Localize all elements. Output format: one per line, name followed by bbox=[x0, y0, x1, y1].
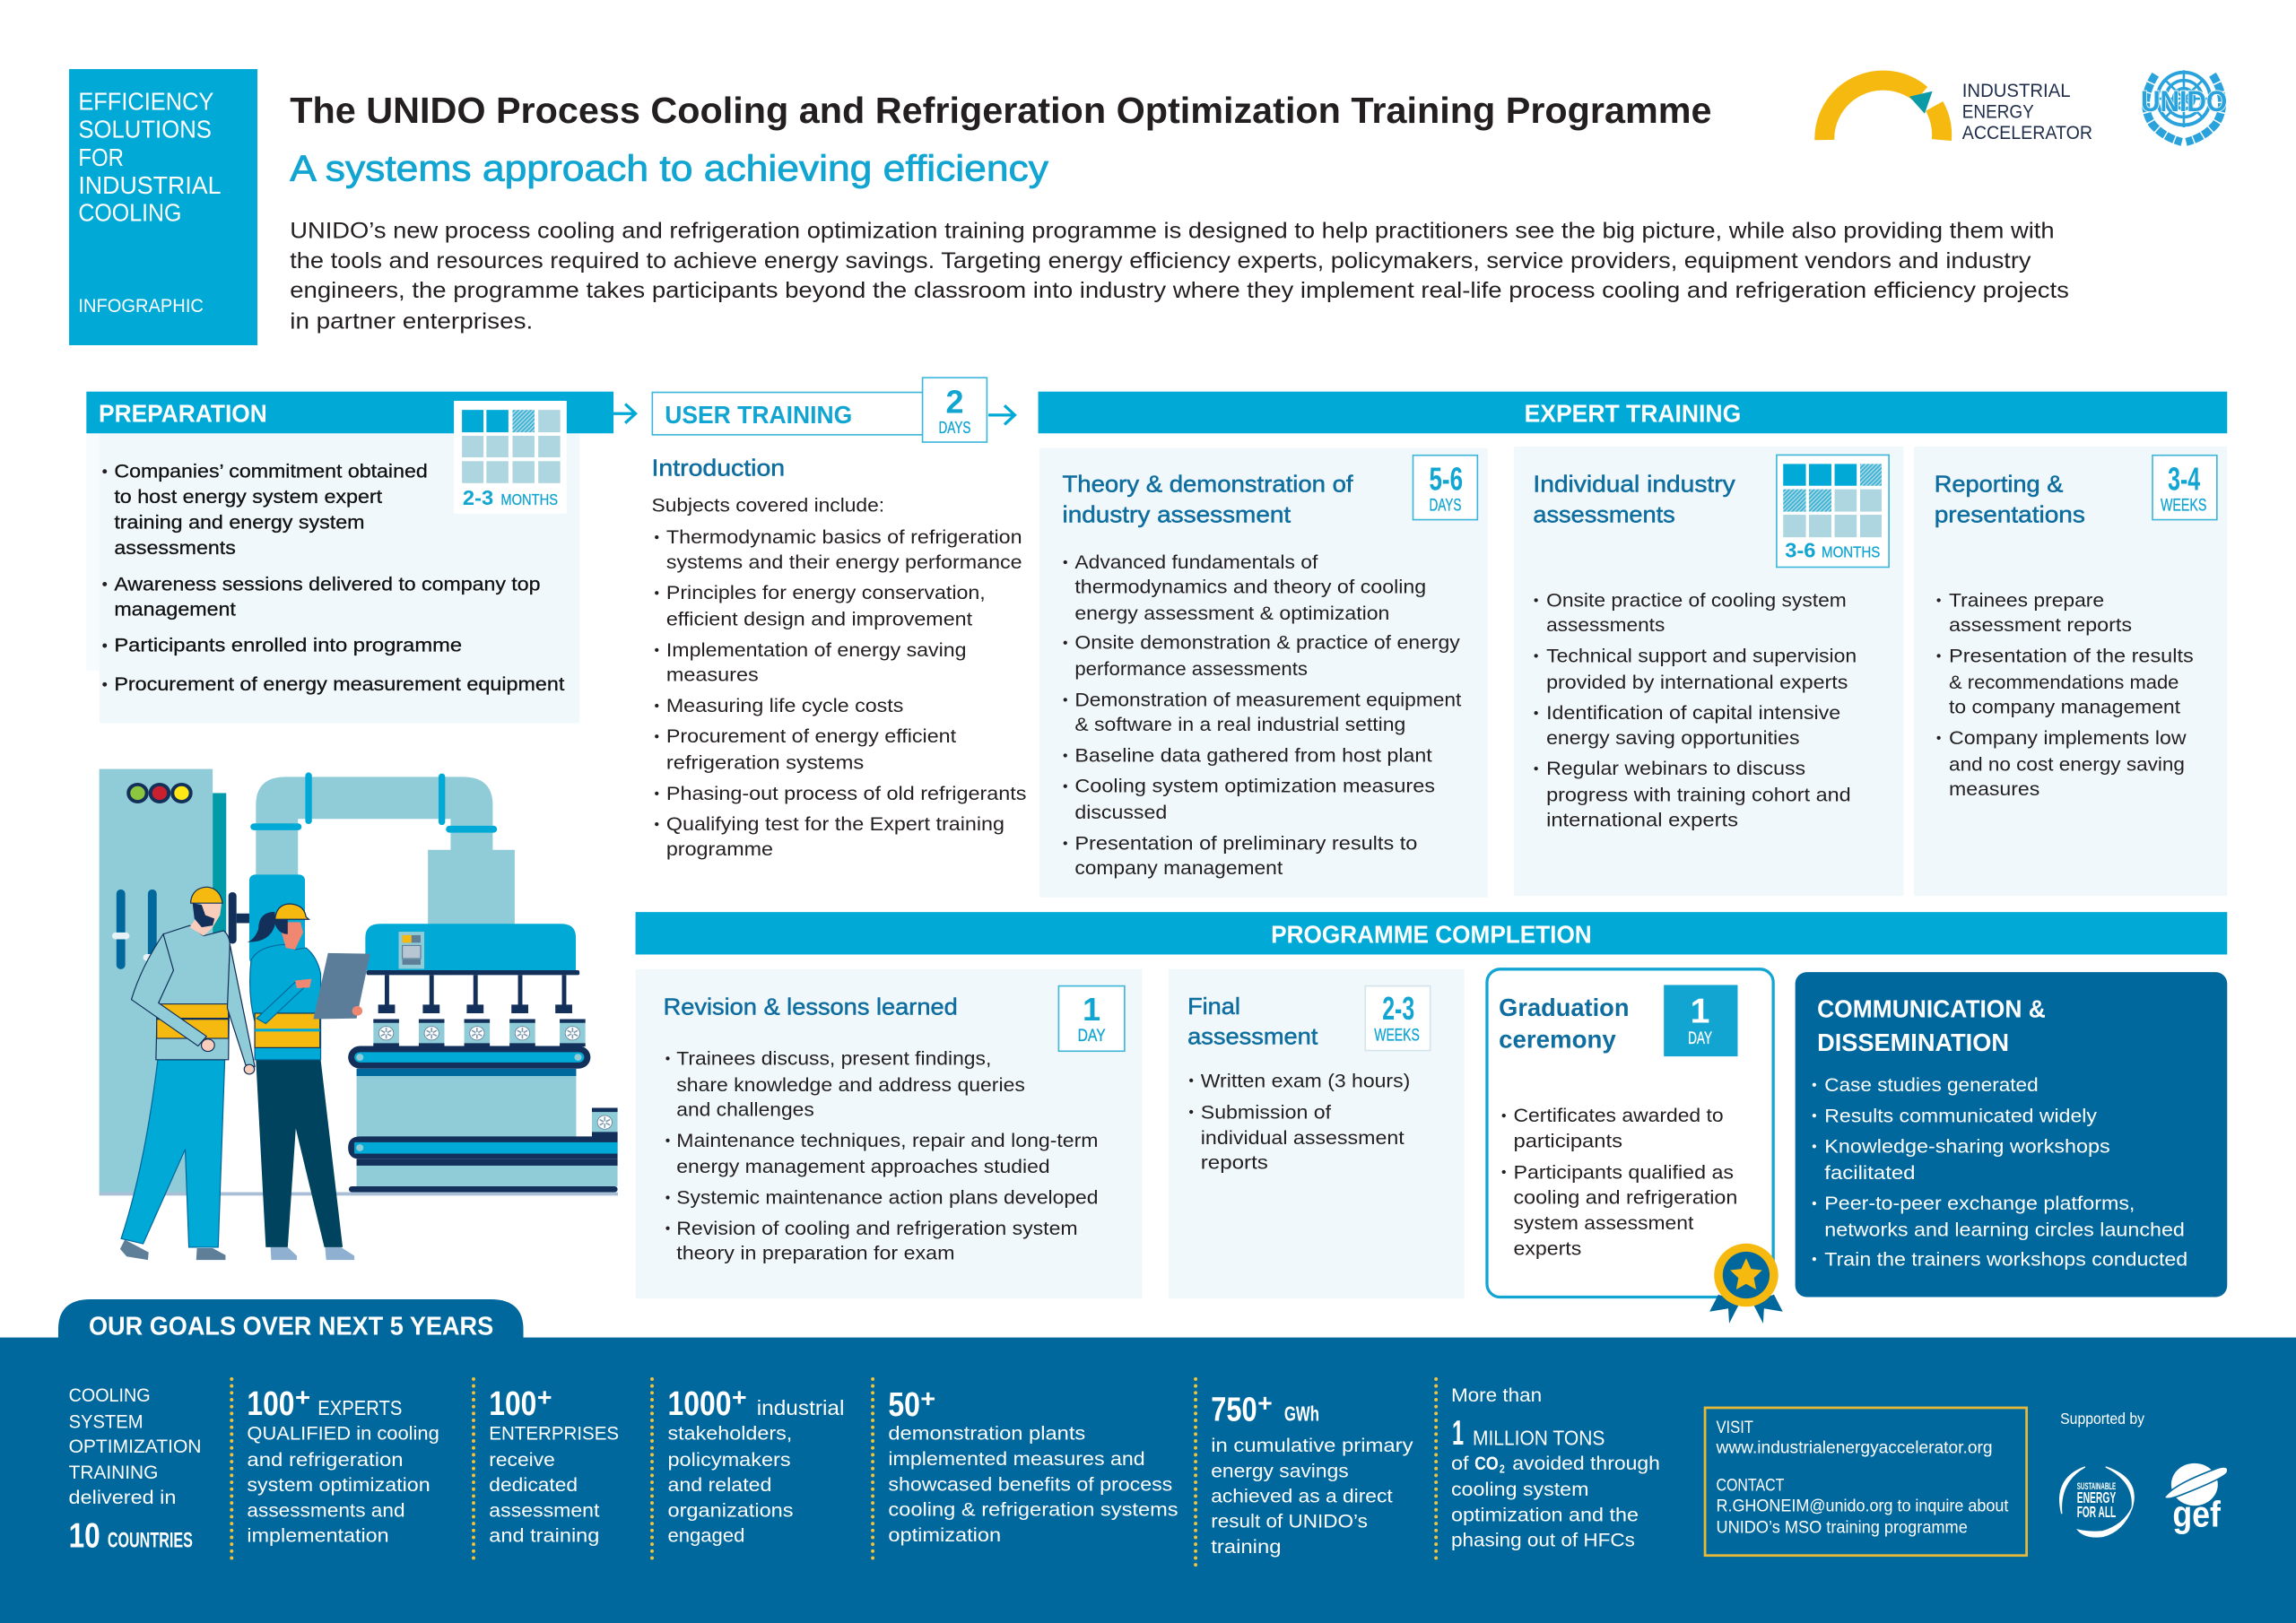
bullet list: Baseline data gathered from host plant bbox=[1074, 743, 1432, 766]
goal: 100+ enterprises: ENTERPRISES bbox=[489, 1422, 619, 1445]
bullet list bbox=[1813, 1073, 2187, 1270]
goal: 10 countries: TRAINING bbox=[69, 1461, 158, 1483]
goal: 1000+ stakeholders: industrial bbox=[757, 1396, 844, 1419]
bullet list: theory in preparation for exam bbox=[676, 1242, 954, 1264]
sidebar: efficiency solutions label: EFFICIENCY bbox=[78, 87, 213, 115]
user training bullet list: systems and their energy performance bbox=[666, 551, 1022, 573]
bullet list: progress with training cohort and bbox=[1546, 784, 1851, 806]
goal: 1 million tons of CO2: cooling system bbox=[1451, 1478, 1588, 1500]
goal: 1 million tons of CO2: of bbox=[1451, 1452, 1470, 1474]
duration: 1 day: DAY bbox=[1688, 1028, 1712, 1048]
goal: 1000+ stakeholders: policymakers bbox=[667, 1448, 791, 1471]
heading bbox=[1935, 471, 2085, 528]
logo: sustainable energy for all bbox=[2060, 1467, 2134, 1537]
goal: 100+ experts bbox=[247, 1383, 439, 1547]
goal: 100+ experts: implementation bbox=[247, 1524, 389, 1547]
heading bbox=[1499, 994, 1629, 1053]
user training bullet list: Measuring life cycle costs bbox=[666, 694, 904, 716]
logo: sustainable energy for all: SUSTAINABLE bbox=[2077, 1481, 2116, 1492]
goal: 10 countries: COUNTRIES bbox=[108, 1529, 193, 1553]
bullet list: Submission of bbox=[1201, 1101, 1332, 1124]
preparation heading: PREPARATION bbox=[99, 400, 267, 428]
heading: assessment bbox=[1187, 1023, 1318, 1050]
bullet list: Advanced fundamentals of bbox=[1074, 551, 1318, 573]
header bar: expert training bbox=[1039, 392, 2227, 433]
panel: user training bbox=[652, 378, 1027, 860]
user training bullet list: Thermodynamic basics of refrigeration bbox=[666, 525, 1022, 548]
bullet list bbox=[1064, 551, 1461, 879]
goal: 1 million tons of CO2: More than bbox=[1451, 1384, 1542, 1406]
arrow: user training to expert training bbox=[988, 405, 1014, 424]
intro paragraph: engineers, the programme takes participants beyond the classroom into industry where they implement real-life process cooling and refrigeration efficiency projects bbox=[290, 278, 2069, 303]
goal: 100+ experts: QUALIFIED in cooling bbox=[247, 1422, 439, 1445]
sidebar: efficiency solutions label bbox=[69, 69, 257, 345]
intro paragraph bbox=[290, 219, 2069, 334]
heading: assessments bbox=[1533, 501, 1675, 528]
goal: 50+ demonstration plants: demonstration plants bbox=[888, 1422, 1085, 1445]
user training bullet list: Principles for energy conservation, bbox=[666, 581, 986, 603]
bullet list: facilitated bbox=[1824, 1161, 1916, 1184]
heading: COMMUNICATION & bbox=[1817, 995, 2046, 1023]
bullet list: Results communicated widely bbox=[1824, 1104, 2097, 1126]
logo: Industrial Energy Accelerator: ENERGY bbox=[1962, 100, 2034, 123]
icon: medal with star bbox=[1709, 1244, 1783, 1324]
bullet list: discussed bbox=[1074, 801, 1167, 823]
goal: 100+ experts: + bbox=[295, 1383, 310, 1410]
logo: UNIDO emblem bbox=[2141, 70, 2227, 142]
logo: sustainable energy for all: ENERGY bbox=[2077, 1488, 2116, 1506]
sidebar: efficiency solutions label: INDUSTRIAL bbox=[78, 171, 222, 199]
user training heading box: USER TRAINING bbox=[665, 401, 852, 429]
goal: 750+ GWh: GWh bbox=[1284, 1402, 1319, 1426]
bullet list: share knowledge and address queries bbox=[676, 1073, 1025, 1096]
bullet list: energy assessment & optimization bbox=[1074, 602, 1389, 624]
goal: 50+ demonstration plants: implemented measures and bbox=[888, 1447, 1145, 1470]
bullet list: performance assessments bbox=[1074, 657, 1308, 680]
goal: 1000+ stakeholders: stakeholders, bbox=[667, 1422, 792, 1445]
goal: 1000+ stakeholders: and related bbox=[667, 1473, 771, 1496]
goal: 1 million tons of CO2: MILLION TONS bbox=[1473, 1426, 1605, 1449]
bullet list: measures bbox=[1949, 777, 2039, 800]
preparation bullet list: assessments bbox=[114, 536, 236, 559]
heading bbox=[1817, 995, 2046, 1056]
header bar: programme completion bbox=[636, 912, 2227, 954]
bullet list bbox=[1189, 1070, 1410, 1173]
heading: DISSEMINATION bbox=[1817, 1028, 2009, 1056]
user training bullet list: refrigeration systems bbox=[666, 751, 864, 774]
bullet list: Case studies generated bbox=[1824, 1073, 2039, 1096]
logo: sustainable energy for all: FOR ALL bbox=[2077, 1503, 2116, 1521]
subjects lead-in: Subjects covered include: bbox=[652, 493, 884, 516]
goal: 50+ demonstration plants: + bbox=[920, 1384, 935, 1412]
goal: 100+ enterprises: assessment bbox=[489, 1498, 599, 1521]
heading: Theory & demonstration of bbox=[1062, 471, 1353, 498]
heading: Graduation bbox=[1499, 994, 1629, 1021]
goal: 1 million tons of CO2: CO bbox=[1474, 1452, 1499, 1474]
goal: 1000+ stakeholders: organizations bbox=[667, 1498, 794, 1521]
panel: graduation ceremony bbox=[1487, 969, 1783, 1324]
preparation bullet list: management bbox=[114, 598, 236, 621]
goal: 50+ demonstration plants bbox=[888, 1384, 1178, 1546]
goal: 100+ enterprises: and training bbox=[489, 1524, 599, 1547]
panel: reporting and presentations bbox=[1914, 447, 2227, 896]
logo: Industrial Energy Accelerator bbox=[1824, 79, 2092, 143]
goal: 1 million tons of CO2 bbox=[1451, 1384, 1660, 1551]
panel: communication and dissemination bbox=[1796, 972, 2227, 1298]
goal: 750+ GWh: result of UNIDO’s bbox=[1211, 1510, 1368, 1532]
intro paragraph: UNIDO’s new process cooling and refrigeration optimization training programme is designed to help practitioners see the big picture, while also providing them with bbox=[290, 219, 2055, 244]
bullet list: Trainees prepare bbox=[1949, 588, 2104, 611]
bullet list: Presentation of preliminary results to bbox=[1074, 831, 1417, 854]
bullet list: Technical support and supervision bbox=[1546, 644, 1857, 666]
bullet list: energy management approaches studied bbox=[676, 1155, 1050, 1177]
duration: 5-6 days bbox=[1413, 456, 1477, 520]
panel: revision and lessons learned bbox=[636, 969, 1142, 1298]
goal: 750+ GWh bbox=[1211, 1389, 1413, 1558]
user training bullet list: Implementation of energy saving bbox=[666, 638, 967, 661]
goal: 1 million tons of CO2: optimization and the bbox=[1451, 1503, 1639, 1525]
duration: 5-6 days: DAYS bbox=[1429, 495, 1461, 515]
bullet list: Certificates awarded to bbox=[1514, 1104, 1724, 1126]
bullet list: system assessment bbox=[1514, 1211, 1693, 1234]
sidebar: efficiency solutions label: FOR bbox=[78, 143, 124, 171]
bullet list: Participants qualified as bbox=[1514, 1160, 1734, 1183]
intro paragraph: in partner enterprises. bbox=[290, 309, 533, 334]
duration: 5-6 days: 5-6 bbox=[1429, 460, 1463, 497]
bullet list: & recommendations made bbox=[1949, 671, 2179, 693]
duration: 2 days: DAYS bbox=[939, 418, 970, 437]
bullet list: cooling and refrigeration bbox=[1514, 1186, 1737, 1209]
subtitle: A systems approach to achieving efficiency bbox=[290, 148, 1049, 189]
bullet list: Maintenance techniques, repair and long-term bbox=[676, 1129, 1098, 1151]
goals heading: OUR GOALS OVER NEXT 5 YEARS bbox=[89, 1312, 493, 1341]
bullet list bbox=[665, 1046, 1098, 1264]
bullet list: Knowledge-sharing workshops bbox=[1824, 1135, 2110, 1158]
goal: 10 countries: OPTIMIZATION bbox=[69, 1435, 201, 1457]
bullet list: Written exam (3 hours) bbox=[1201, 1070, 1410, 1092]
duration: 1 day bbox=[1058, 986, 1125, 1051]
contact box: UNIDO’s MSO training programme bbox=[1716, 1519, 1968, 1538]
bullet list: Peer-to-peer exchange platforms, bbox=[1824, 1192, 2135, 1214]
panel: theory and demonstration bbox=[1039, 448, 1488, 898]
goal: 100+ experts: 100 bbox=[247, 1384, 294, 1423]
bullet list: international experts bbox=[1546, 808, 1738, 830]
bullet list bbox=[1502, 1104, 1737, 1259]
bullet list: assessments bbox=[1546, 613, 1665, 636]
goal: 100+ enterprises: 100 bbox=[489, 1384, 536, 1423]
bullet list: Company implements low bbox=[1949, 726, 2187, 749]
duration: 1 day bbox=[1664, 985, 1737, 1056]
worker: man bbox=[120, 887, 255, 1260]
goal: 750+ GWh: achieved as a direct bbox=[1211, 1484, 1393, 1506]
bullet list: to company management bbox=[1949, 696, 2180, 718]
calendar: 3-6 months: MONTHS bbox=[1822, 543, 1880, 561]
contact box: VISIT bbox=[1716, 1419, 1753, 1437]
goal: 750+ GWh: + bbox=[1257, 1389, 1273, 1417]
user training heading box bbox=[652, 393, 923, 435]
preparation bullet list: Awareness sessions delivered to company top bbox=[114, 572, 540, 595]
goal: 100+ experts: EXPERTS bbox=[317, 1396, 402, 1419]
preparation bullet list: Companies’ commitment obtained bbox=[114, 460, 428, 482]
duration: 2-3 weeks: 2-3 bbox=[1382, 990, 1414, 1027]
goal: 1 million tons of CO2: avoided through bbox=[1512, 1452, 1660, 1474]
goal: 50+ demonstration plants: optimization bbox=[888, 1523, 1001, 1546]
goal: 1 million tons of CO2: phasing out of HFCs bbox=[1451, 1529, 1635, 1551]
bullet list: Identification of capital intensive bbox=[1546, 701, 1840, 724]
bullet list: Train the trainers workshops conducted bbox=[1824, 1247, 2187, 1270]
bullet list: and no cost energy saving bbox=[1949, 752, 2185, 775]
duration: 1 day: DAY bbox=[1078, 1026, 1106, 1046]
sidebar: efficiency solutions label: SOLUTIONS bbox=[78, 115, 212, 143]
goal: 750+ GWh: energy savings bbox=[1211, 1459, 1349, 1481]
bullet list: networks and learning circles launched bbox=[1824, 1219, 2185, 1241]
goal: 50+ demonstration plants: 50 bbox=[888, 1385, 920, 1424]
duration: 2 days bbox=[923, 378, 987, 442]
preparation header bar bbox=[86, 392, 613, 433]
goal: 750+ GWh: in cumulative primary bbox=[1211, 1434, 1413, 1456]
calendar: 3-6 months bbox=[1777, 455, 1889, 567]
calendar: 2-3 months bbox=[454, 401, 567, 514]
bullet list: assessment reports bbox=[1949, 613, 2132, 636]
panel: preparation bbox=[86, 392, 613, 724]
bullet list: Presentation of the results bbox=[1949, 644, 2194, 666]
duration: 2 days: 2 bbox=[945, 383, 963, 420]
goal: 750+ GWh: 750 bbox=[1211, 1391, 1257, 1429]
heading: presentations bbox=[1935, 501, 2085, 528]
bullet list: experts bbox=[1514, 1237, 1581, 1259]
bullet list: company management bbox=[1074, 856, 1283, 879]
heading: ceremony bbox=[1499, 1025, 1616, 1053]
user training bullet list: Phasing-out process of old refrigerants bbox=[666, 782, 1027, 804]
panel: final assessment bbox=[1169, 969, 1465, 1298]
calendar: 3-6 months: 3-6 bbox=[1785, 539, 1815, 562]
goal: 100+ enterprises: receive bbox=[489, 1448, 555, 1471]
duration: 1 day: 1 bbox=[1691, 992, 1709, 1030]
intro paragraph: the tools and resources required to achieve energy savings. Targeting energy efficiency experts, policymakers, service providers, equipment vendors and industry bbox=[290, 248, 2031, 273]
panel: individual industry assessments bbox=[1514, 447, 1903, 896]
user training bullet list: programme bbox=[666, 838, 773, 860]
user training bullet list bbox=[655, 525, 1027, 860]
preparation bullet list: Participants enrolled into programme bbox=[114, 634, 462, 656]
goal: 10 countries: COOLING bbox=[69, 1384, 151, 1406]
bullet list: provided by international experts bbox=[1546, 671, 1848, 693]
preparation bullet list bbox=[102, 460, 564, 695]
goal: 1 million tons of CO2: 1 bbox=[1452, 1414, 1464, 1453]
bullet list: thermodynamics and theory of cooling bbox=[1074, 576, 1426, 598]
bullet list: Onsite demonstration & practice of energy bbox=[1074, 631, 1460, 654]
goal: 50+ demonstration plants: cooling & refrigeration systems bbox=[888, 1497, 1178, 1520]
user training bullet list: efficient design and improvement bbox=[666, 608, 972, 630]
heading: industry assessment bbox=[1062, 501, 1292, 528]
user training bullet list: Procurement of energy efficient bbox=[666, 725, 956, 747]
bullet list: & software in a real industrial setting bbox=[1074, 713, 1405, 735]
bullet list: Revision of cooling and refrigeration system bbox=[676, 1217, 1078, 1239]
contact box: www.industrialenergyaccelerator.org bbox=[1715, 1439, 1993, 1458]
user training bullet list: measures bbox=[666, 664, 759, 686]
duration: 2-3 weeks: WEEKS bbox=[1374, 1025, 1420, 1045]
bullet list: reports bbox=[1201, 1150, 1268, 1173]
duration: 3-4 weeks: 3-4 bbox=[2168, 460, 2200, 497]
calendar: 2-3 months: MONTHS bbox=[500, 490, 558, 508]
introduction heading: Introduction bbox=[652, 455, 785, 482]
heading: Reporting & bbox=[1935, 471, 2063, 498]
goal: 1000+ stakeholders: 1000 bbox=[667, 1384, 732, 1423]
user training bullet list: Qualifying test for the Expert training bbox=[666, 812, 1004, 835]
goal: 1000+ stakeholders: engaged bbox=[667, 1524, 744, 1547]
bullet list: energy saving opportunities bbox=[1546, 726, 1800, 749]
logo: UNIDO emblem: UNIDO bbox=[2141, 84, 2227, 117]
goal: 1000+ stakeholders bbox=[667, 1383, 844, 1547]
contact box bbox=[1705, 1408, 2027, 1556]
goal: 100+ experts: assessments and bbox=[247, 1498, 405, 1521]
goal: 100+ enterprises bbox=[489, 1383, 619, 1547]
goal: 100+ enterprises: + bbox=[537, 1383, 552, 1410]
duration: 3-4 weeks bbox=[2152, 456, 2217, 520]
sidebar: efficiency solutions label: INFOGRAPHIC bbox=[78, 296, 204, 317]
bullet list: Demonstration of measurement equipment bbox=[1074, 688, 1461, 710]
header bar: programme completion: PROGRAMME COMPLETION bbox=[1271, 920, 1592, 948]
calendar: 2-3 months: 2-3 bbox=[463, 486, 493, 509]
goal: 10 countries: SYSTEM bbox=[69, 1410, 144, 1432]
bullet list bbox=[1535, 588, 1857, 830]
header bar: expert training: EXPERT TRAINING bbox=[1525, 400, 1741, 428]
preparation bullet list: Procurement of energy measurement equipment bbox=[114, 673, 564, 695]
goal: 10 countries: delivered in bbox=[69, 1486, 176, 1508]
illustration: factory workers and cooling machine bbox=[100, 769, 618, 1260]
bullet list: Onsite practice of cooling system bbox=[1546, 588, 1847, 611]
heading bbox=[1062, 471, 1353, 528]
heading: Final bbox=[1187, 993, 1240, 1020]
heading bbox=[1187, 993, 1318, 1050]
goal: 50+ demonstration plants: showcased benefits of process bbox=[888, 1473, 1172, 1496]
heading bbox=[1533, 471, 1735, 528]
goal: 10 countries bbox=[69, 1384, 201, 1556]
logo: Industrial Energy Accelerator: ACCELERATOR bbox=[1962, 121, 2092, 143]
duration: 2-3 weeks bbox=[1365, 986, 1431, 1051]
goal: 100+ enterprises: dedicated bbox=[489, 1473, 578, 1496]
logo: Industrial Energy Accelerator: INDUSTRIAL bbox=[1962, 79, 2071, 101]
supported by label: Supported by bbox=[2060, 1410, 2144, 1428]
logo: gef: gef bbox=[2172, 1493, 2221, 1534]
bullet list: Cooling system optimization measures bbox=[1074, 775, 1435, 797]
contact box: R.GHONEIM@unido.org to inquire about bbox=[1716, 1497, 2009, 1516]
preparation bullet list: training and energy system bbox=[114, 510, 365, 533]
goal: 10 countries: 10 bbox=[69, 1517, 100, 1556]
goal: 1 million tons of CO2: 2 bbox=[1500, 1462, 1505, 1475]
bullet list bbox=[1937, 588, 2194, 800]
bullet list: Regular webinars to discuss bbox=[1546, 757, 1805, 779]
arrow: preparation to user training bbox=[613, 404, 636, 423]
title: The UNIDO Process Cooling and Refrigeration Optimization Training Programme bbox=[290, 90, 1712, 131]
preparation bullet list: to host energy system expert bbox=[114, 485, 382, 508]
bullet list: Systemic maintenance action plans developed bbox=[676, 1186, 1098, 1209]
band: our goals over next 5 years bbox=[0, 1299, 2296, 1623]
bullet list: Trainees discuss, present findings, bbox=[676, 1046, 991, 1069]
worker: woman with tablet bbox=[248, 904, 370, 1260]
goal: 1000+ stakeholders: + bbox=[732, 1383, 747, 1410]
duration: 3-4 weeks: WEEKS bbox=[2161, 495, 2206, 515]
heading: Individual industry bbox=[1533, 471, 1735, 498]
heading: Revision & lessons learned bbox=[664, 993, 958, 1020]
bullet list: individual assessment bbox=[1201, 1126, 1405, 1149]
bullet list: participants bbox=[1514, 1129, 1622, 1151]
goal: 100+ experts: and refrigeration bbox=[247, 1448, 404, 1471]
goal: 750+ GWh: training bbox=[1211, 1535, 1282, 1558]
sidebar: efficiency solutions label: COOLING bbox=[78, 198, 181, 226]
goal: 100+ experts: system optimization bbox=[247, 1473, 430, 1496]
bullet list: and challenges bbox=[676, 1098, 814, 1121]
duration: 1 day: 1 bbox=[1083, 991, 1100, 1028]
logo: gef bbox=[2164, 1463, 2228, 1534]
contact box: CONTACT bbox=[1716, 1476, 1785, 1495]
